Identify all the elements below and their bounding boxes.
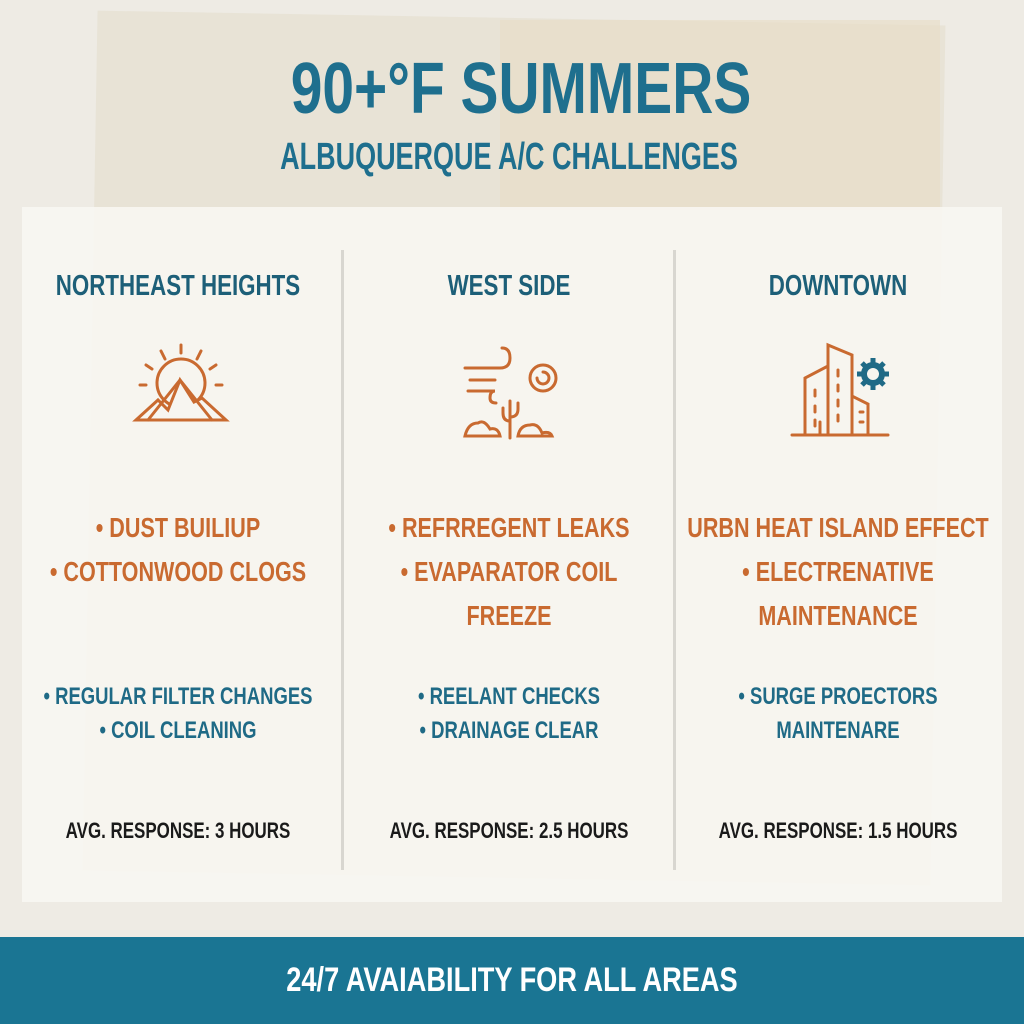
solutions: west side [418,683,600,744]
solutions: west side: • REELANT CHECKS [418,683,600,710]
heading: downtown: DOWNTOWN [769,270,907,302]
heading: northeast heights: NORTHEAST HEIGHTS [56,270,300,302]
problems: west side [388,512,630,631]
problems: downtown: • ELECTRENATIVE [742,556,934,587]
solutions: northeast heights: • REGULAR FILTER CHANGES [44,683,312,710]
problems: northeast heights: • COTTONWOOD CLOGS [50,556,306,587]
problems: northeast heights: • DUST BUILIUP [96,512,260,543]
subtitle: ALBUQUERQUE A/C CHALLENGES [280,136,738,178]
problems: downtown: URBN HEAT ISLAND EFFECT [687,512,989,543]
problems: northeast heights [50,512,306,587]
solutions: northeast heights: • COIL CLEANING [99,717,257,744]
heading: west side: WEST SIDE [448,270,570,302]
solutions: downtown: MAINTENARE [776,717,900,744]
problems: west side: FREEZE [466,600,552,631]
problems: downtown [687,512,989,631]
response: northeast heights: AVG. RESPONSE: 3 HOURS [66,818,290,843]
response: west side: AVG. RESPONSE: 2.5 HOURS [390,818,628,843]
solutions: downtown [738,683,938,744]
dividers [341,250,344,870]
background map [83,11,945,885]
problems: west side: • EVAPARATOR COIL [401,556,617,587]
footer text: 24/7 AVAIABILITY FOR ALL AREAS [286,961,738,999]
solutions: northeast heights [44,683,312,744]
response: downtown: AVG. RESPONSE: 1.5 HOURS [719,818,957,843]
solutions: west side: • DRAINAGE CLEAR [420,717,598,744]
problems: west side: • REFRREGENT LEAKS [388,512,630,543]
title: 90+°F SUMMERS [291,49,751,129]
problems: downtown: MAINTENANCE [758,600,918,631]
main panel [22,207,1002,902]
solutions: downtown: • SURGE PROECTORS [738,683,938,710]
icon: wind cactus [463,346,558,440]
icon: sun mountains [132,344,230,422]
footer bar [0,937,1024,1024]
icon: buildings gear [790,342,890,436]
